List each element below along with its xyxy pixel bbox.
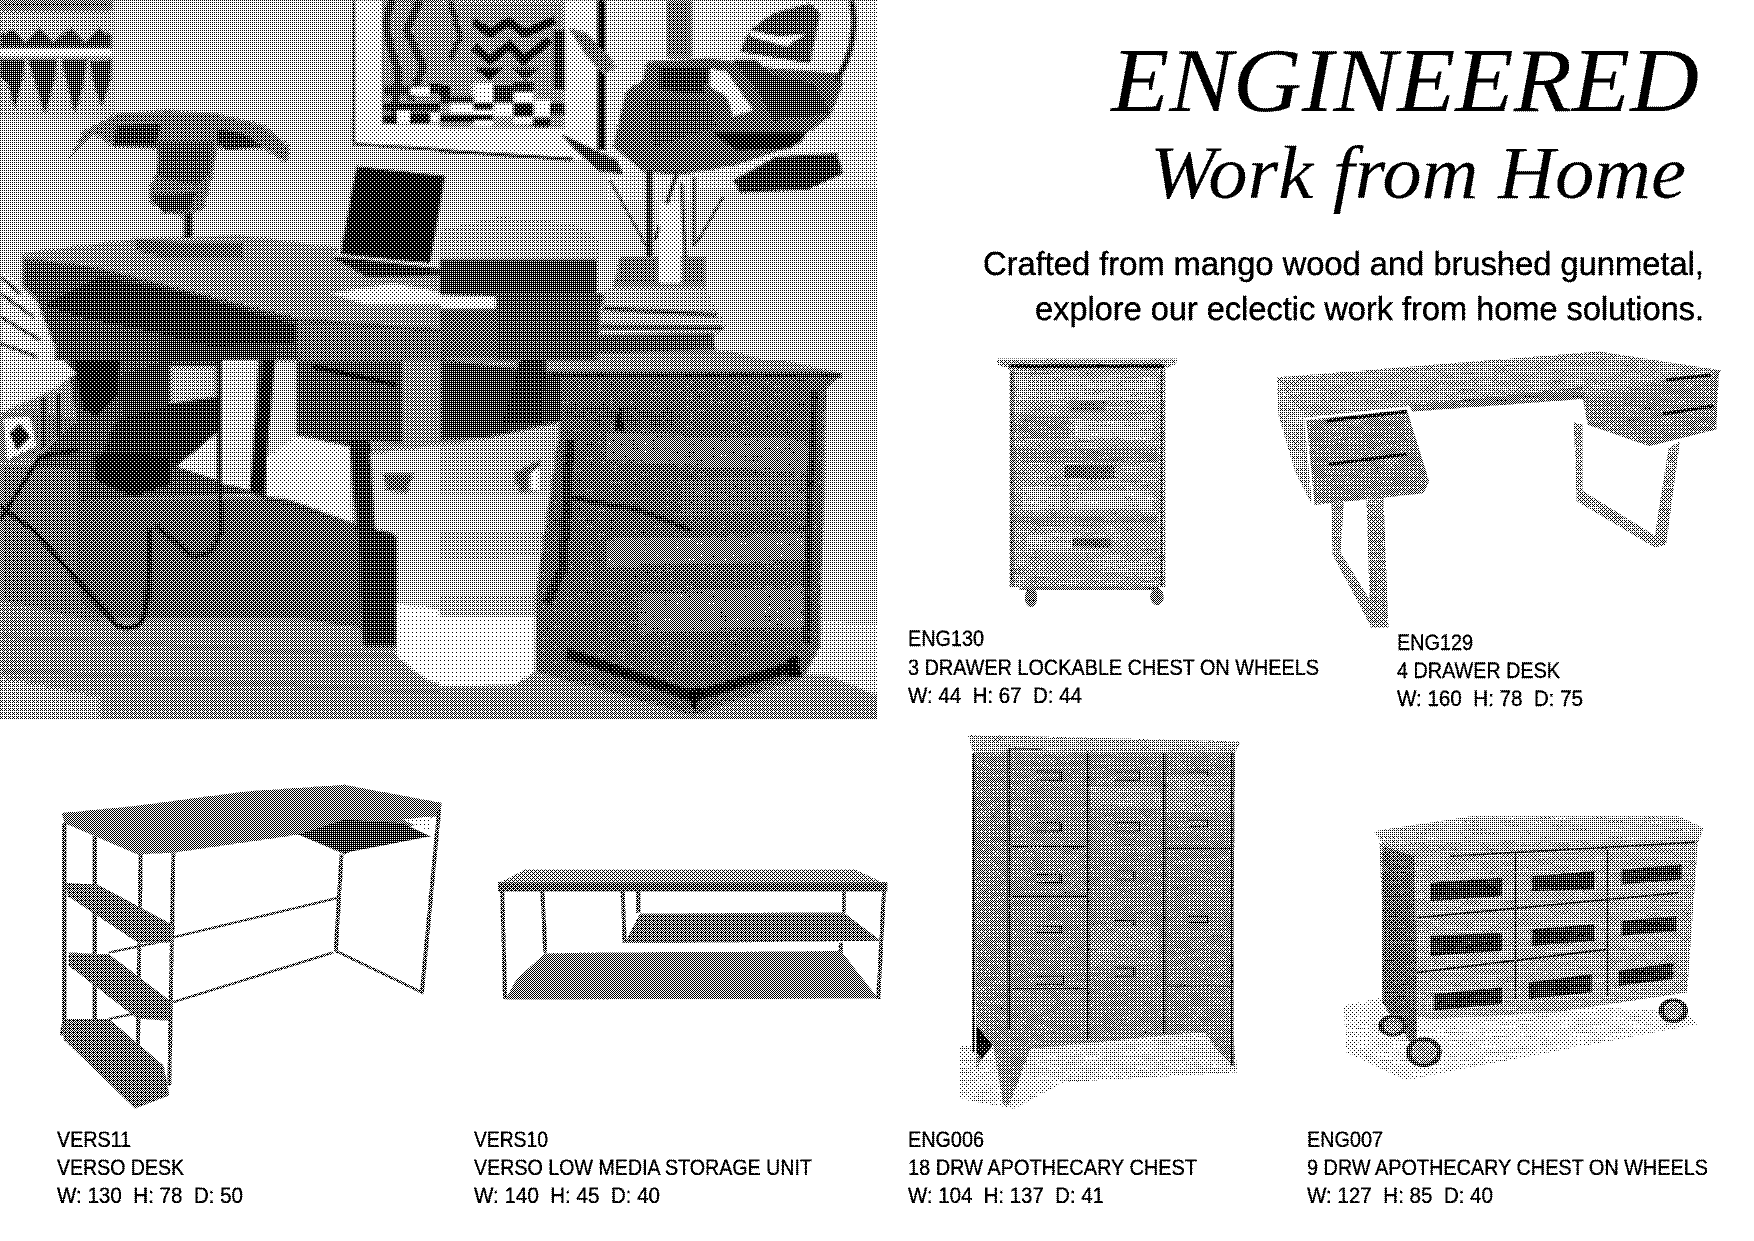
potted tropical leaf (68, 110, 290, 238)
rug and floor (0, 467, 100, 623)
product label: VERS10: VERS10 (474, 1127, 548, 1152)
desk front (23, 258, 450, 362)
chair fabric (0, 360, 77, 413)
product image: ENG130 chest on wheels (997, 359, 1178, 607)
product label: ENG007 (1307, 1127, 1708, 1208)
product image: VERS11 verso desk (62, 785, 442, 1109)
product label: ENG130: ENG130 (908, 626, 984, 651)
product label: VERS10: W: 140 H: 45 D: 40 (474, 1183, 660, 1208)
print right part (440, 0, 565, 128)
laptop (333, 165, 446, 278)
product label: ENG129 (1397, 630, 1583, 711)
product label: ENG130: W: 44 H: 67 D: 44 (908, 683, 1082, 708)
product image: ENG006 18 drawer chest (960, 735, 1240, 1109)
product label: ENG006: ENG006 (908, 1127, 984, 1152)
product label: VERS10: VERSO LOW MEDIA STORAGE UNIT (474, 1155, 812, 1180)
product label: VERS10 (474, 1127, 812, 1208)
product label: VERS11: W: 130 H: 78 D: 50 (57, 1183, 243, 1208)
print mat and frame (440, 0, 617, 161)
product label: ENG007: ENG007 (1307, 1127, 1383, 1152)
chair wire frame (0, 360, 220, 628)
product label: VERS11: VERSO DESK (57, 1155, 184, 1180)
tropical plant leaves (560, 0, 854, 193)
plant stalk band (667, 0, 692, 58)
product label: ENG006 (908, 1127, 1197, 1208)
product label: ENG007: 9 DRW APOTHECARY CHEST ON WHEELS (1307, 1155, 1708, 1180)
title: ENGINEERED: ENGINEERED (1109, 30, 1699, 131)
plant stems (610, 170, 723, 283)
panel: lifestyle photo of home office (0, 0, 887, 730)
filing cabinet (537, 373, 843, 715)
wall between desk legs (222, 360, 258, 490)
intro text: Crafted from mango wood and brushed gunmetal, (983, 245, 1704, 282)
intro text (983, 245, 1704, 327)
product image: ENG129 4 drawer desk (1277, 352, 1722, 628)
product image: ENG007 9 drawer chest on wheels (1344, 816, 1703, 1080)
desk top surface (22, 235, 450, 333)
product label: ENG006: W: 104 H: 137 D: 41 (908, 1183, 1104, 1208)
product label: ENG130 (908, 626, 1319, 708)
product label: ENG129: W: 160 H: 78 D: 75 (1397, 686, 1583, 711)
basket (440, 423, 560, 687)
woven pot (597, 203, 770, 362)
drawer (297, 360, 402, 443)
front desk leg (350, 440, 397, 647)
product label: ENG130: 3 DRAWER LOCKABLE CHEST ON WHEELS (908, 655, 1319, 680)
product label: ENG006: 18 DRW APOTHECARY CHEST (908, 1155, 1197, 1180)
desk leg (250, 360, 275, 493)
wall art left (0, 0, 113, 117)
intro text: explore our eclectic work from home solutions. (1035, 290, 1704, 327)
product label: VERS11: VERS11 (57, 1127, 131, 1152)
product label: ENG007: W: 127 H: 85 D: 40 (1307, 1183, 1493, 1208)
laundry basket (373, 500, 450, 607)
subtitle: Work from Home: Work from Home (1150, 132, 1686, 215)
round woven pouf (440, 217, 600, 263)
chair (0, 267, 55, 362)
photo: bottom-left desk legs, chair and floor (0, 360, 450, 723)
dark underside region (33, 360, 402, 523)
product label: VERS11 (57, 1127, 243, 1208)
photo: top-left wall and desk (0, 0, 455, 362)
product image: VERS10 low media unit (498, 869, 887, 1000)
framed print left part (353, 0, 455, 151)
product label: ENG129: ENG129 (1397, 630, 1473, 655)
product label: ENG129: 4 DRAWER DESK (1397, 658, 1560, 683)
photo: top-right print, plant and wall (440, 0, 882, 362)
photo: bottom-right cabinet and basket (440, 360, 883, 723)
desk side (440, 360, 560, 440)
